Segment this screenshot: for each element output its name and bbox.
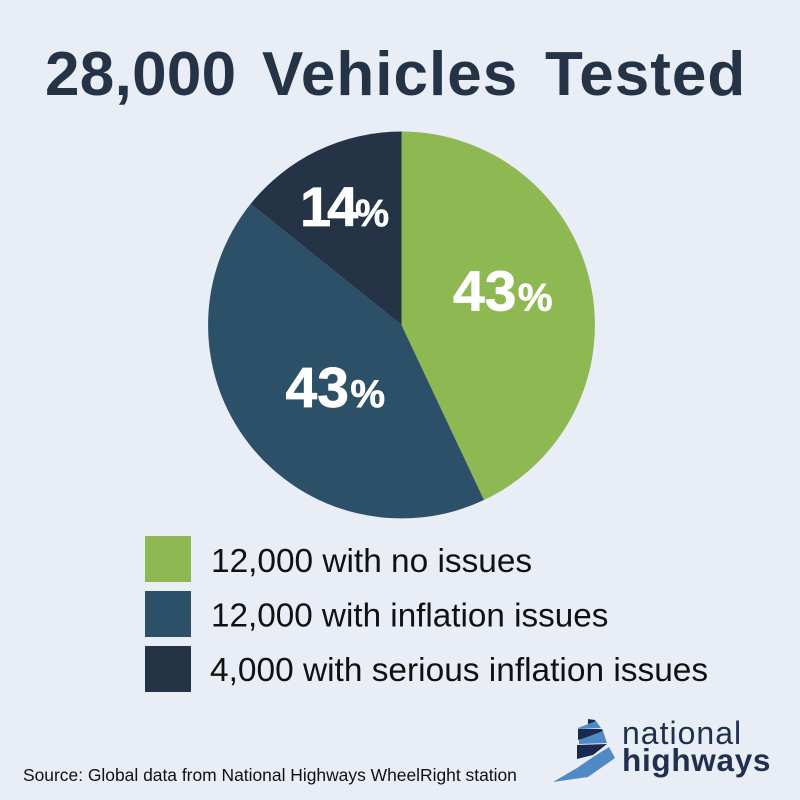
pie slice: serious inflation issues 14% (251, 132, 402, 325)
source note: Source: Global data from National Highways WheelRight station (23, 765, 517, 785)
legend item: inflation issues: 12,000 with inflation issues (211, 598, 608, 634)
label: 43% green: 43% (453, 260, 553, 324)
pie slice: inflation issues 43% (208, 204, 484, 518)
pie slice: no issues 43% (402, 132, 595, 500)
pie chart (208, 132, 595, 518)
logo wordmark: national: national (622, 715, 742, 751)
title: 28,000 (45, 40, 236, 109)
legend item: no issues (145, 536, 532, 582)
legend (145, 536, 708, 692)
label: 43% blue: 43% (286, 356, 385, 420)
title: Vehicles (262, 40, 518, 109)
label: 14%: 14% (300, 175, 389, 238)
icon: ribbon tower (553, 719, 615, 782)
title: Tested (545, 40, 746, 109)
legend item: serious inflation issues: 4,000 with serious inflation issues (210, 652, 708, 689)
logo: national highways (553, 715, 771, 782)
legend item: no issues: 12,000 with no issues (211, 543, 532, 580)
logo wordmark: highways: highways (622, 742, 771, 778)
legend item: inflation issues (145, 591, 608, 637)
